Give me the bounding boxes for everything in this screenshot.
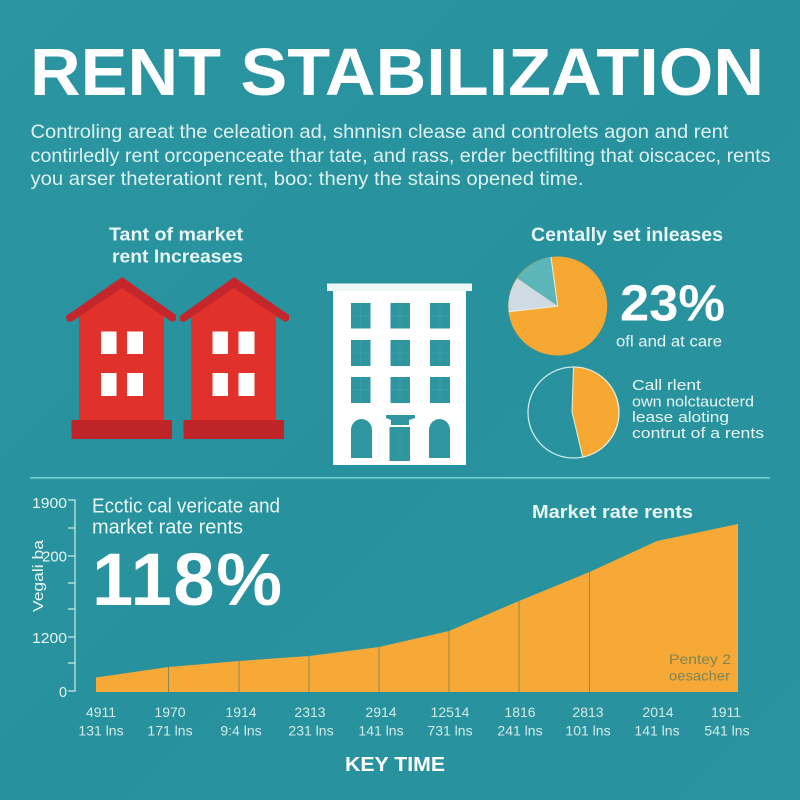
x axis labels: 731 lns [427,722,473,738]
x axis labels: 231 lns [288,722,334,738]
x axis labels: 2914 [365,704,397,720]
x axis labels: 171 lns [147,722,193,738]
x axis labels: 131 lns [78,722,124,738]
x axis labels: 12514 [431,704,470,720]
chart: y axis with ticks and labels: 1900 [32,496,67,512]
x axis labels: 1970 [154,704,186,720]
area annotation [669,651,731,684]
x axis labels [78,704,750,738]
icon: white apartment building [327,284,472,465]
pie caption text block [632,377,764,442]
title: RENT STABILIZATION [30,35,764,110]
chart: orange area of market rents [96,524,738,692]
chart: y axis with ticks and labels: 1200 [32,631,67,647]
x axis labels: 2313 [294,704,326,720]
x axis labels: 541 lns [704,722,750,738]
x axis labels: 101 lns [565,722,611,738]
heading: market rent increases: rent Increases [112,246,243,266]
chart: pie with 23 percent share [508,256,607,356]
chart: y axis with ticks and labels: 0 [59,685,67,701]
x axis labels: 9:4 lns [220,722,262,738]
icon: right red house [180,277,289,439]
pie caption text block: contrut of a rents [632,425,764,442]
x axis labels: 2813 [572,704,604,720]
caption: 23 percent: ofl and at care [616,334,722,350]
heading: market rate rents: Market rate rents [532,502,693,522]
chart subtitle: market rate rents [92,516,243,538]
x axis labels: 141 lns [634,722,680,738]
intro text block: contirledly rent orcopenceate thar tate, and rass, erder bectfilting that oiscacec, rents [30,145,771,167]
x axis labels: 2014 [642,704,674,720]
chart: y axis with ticks and labels [30,496,75,701]
chart subtitle [92,496,280,538]
area annotation: Pentey 2 [669,651,731,667]
icon: left red house [66,277,176,439]
pie caption text block: lease aloting [632,409,729,426]
x axis labels: 4911 [86,704,116,720]
intro text block [30,121,771,190]
pie caption text block: own nolctaucterd [632,394,754,410]
chart subtitle: Ecctic cal vericate and [92,496,280,518]
intro text block: Controling areat the celeation ad, shnnisn clease and controlets agon and rent [30,121,729,143]
x axis labels: 1914 [225,704,257,720]
heading: market rent increases [109,224,243,266]
chart: half-filled pie outline [528,367,619,458]
pie caption text block: Call rlent [632,377,702,394]
y axis title: Vegali ba [30,539,47,612]
stat: 118 percent: 118% [92,538,282,621]
heading: centrally set increases: Centally set inleases [531,225,723,246]
intro text block: you arser theterationt rent, boo: theny the stains opened time. [30,168,584,190]
x axis title: KEY TIME [345,754,445,776]
x axis labels: 241 lns [497,722,543,738]
x axis labels: 141 lns [358,722,404,738]
chart: y axis with ticks and labels: 200 [42,548,67,566]
x axis labels: 1816 [504,704,536,720]
x axis labels: 1911 [711,704,741,720]
area annotation: oesacher [669,668,730,684]
heading: market rent increases: Tant of market [109,224,243,244]
stat: 23 percent: 23% [620,274,725,332]
